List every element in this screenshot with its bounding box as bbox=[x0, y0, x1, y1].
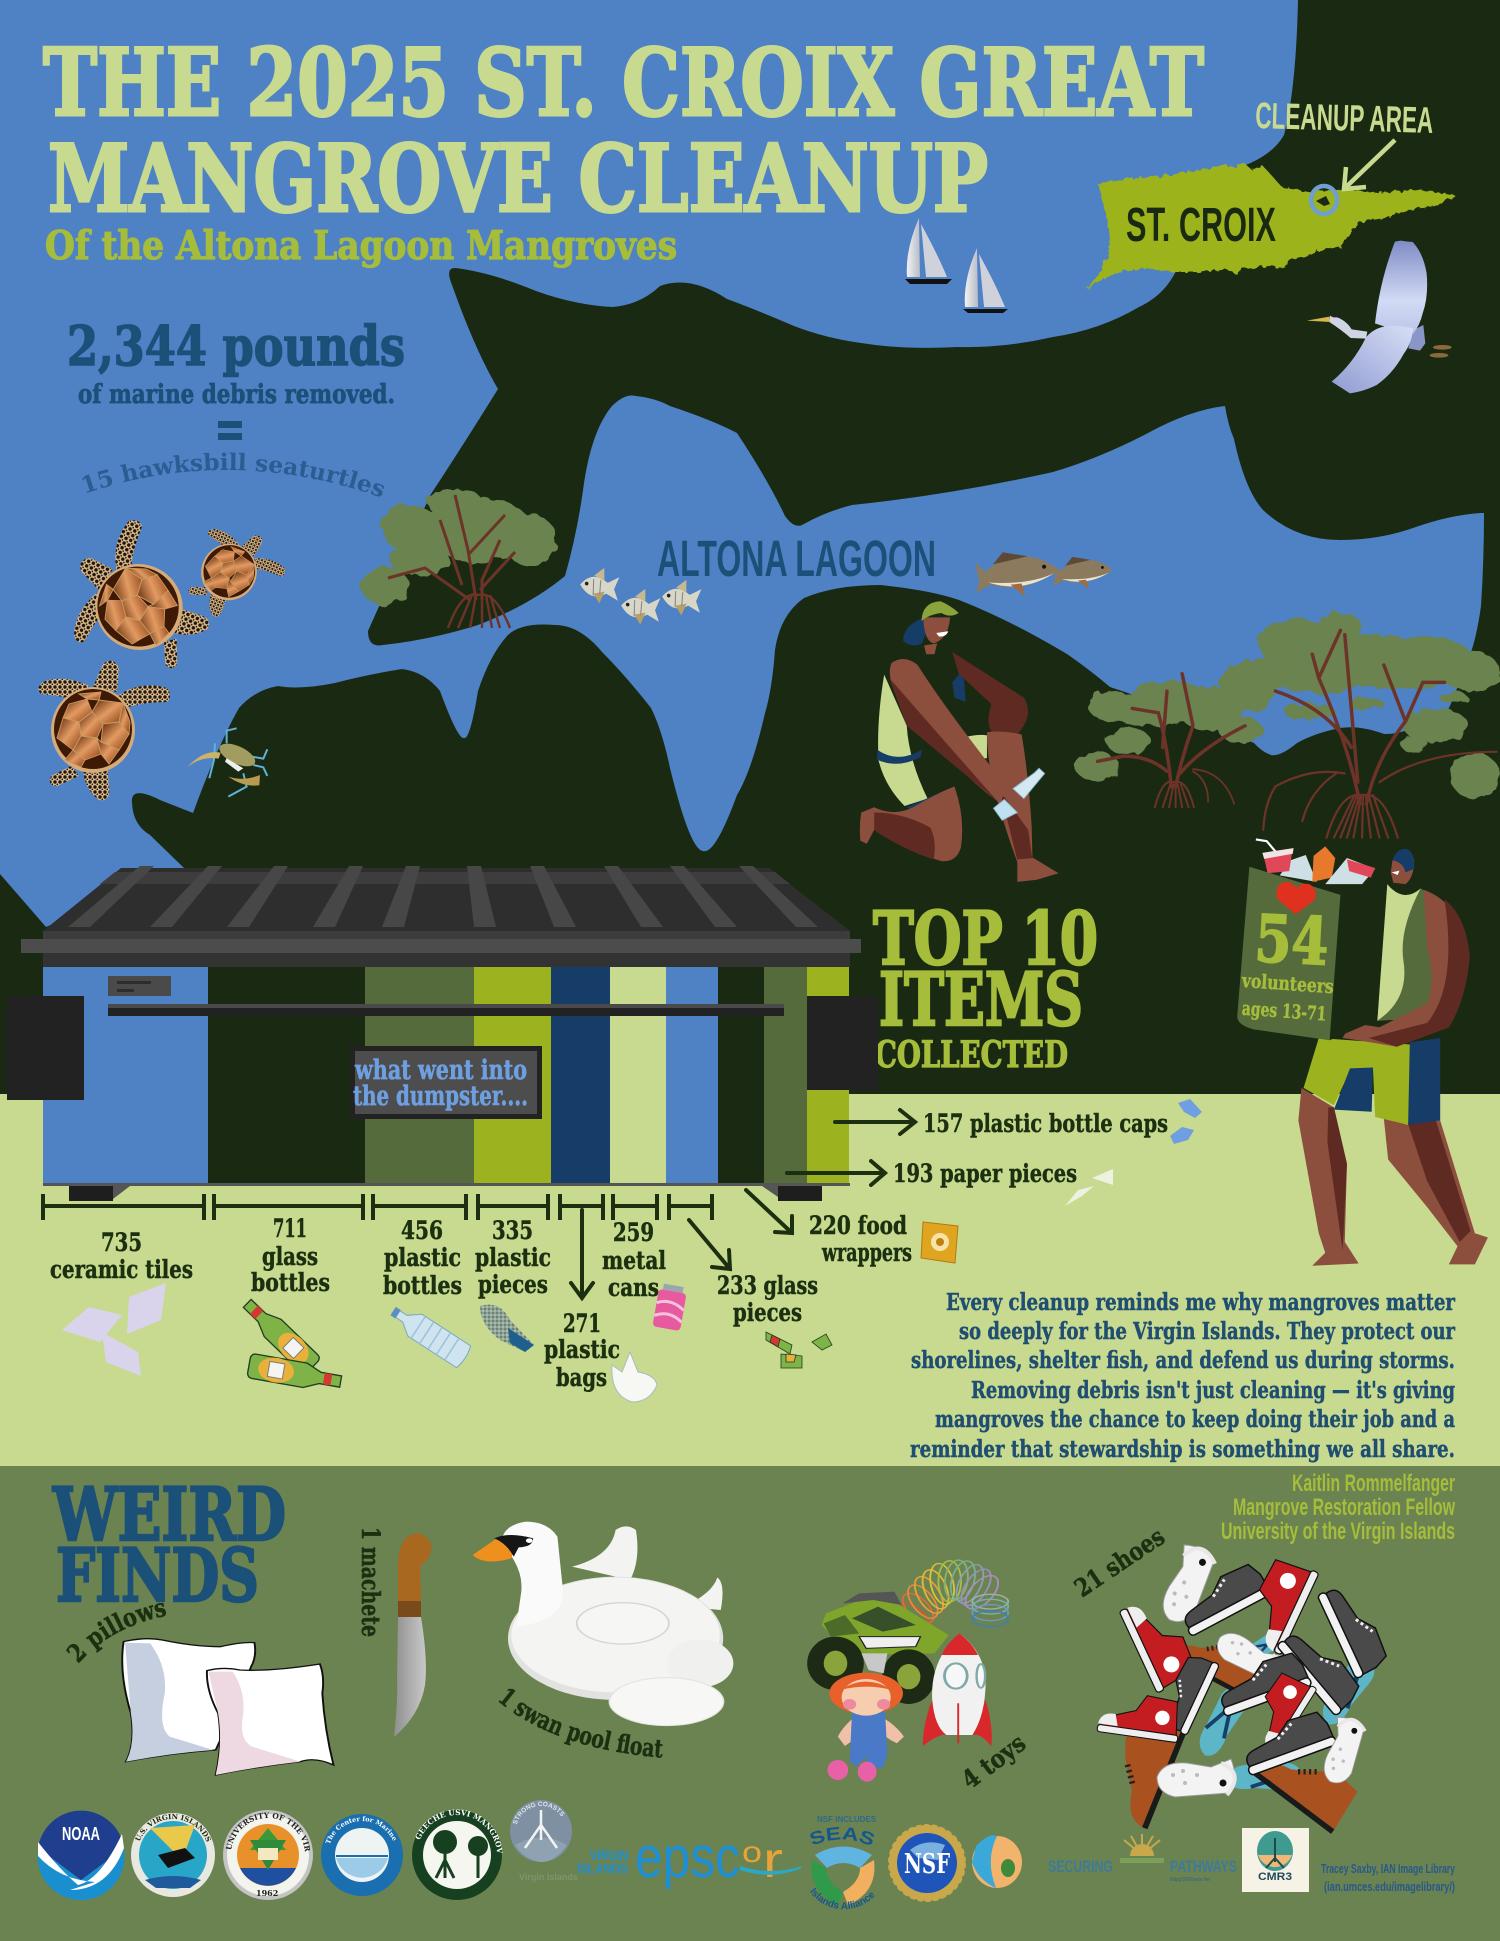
logo: CMR3 bbox=[1242, 1828, 1309, 1892]
toy: monster truck bbox=[807, 1592, 949, 1704]
item label: 335 plastic pieces: 335 bbox=[492, 1216, 533, 1245]
icon: metal can bbox=[652, 1283, 688, 1331]
section heading: top 10 items collected: ITEMS bbox=[879, 957, 1083, 1043]
logo: University of the Virgin Islands: UNIVERSITY OF THE VIRGIN bbox=[226, 1812, 310, 1852]
dumpster handle bar bbox=[108, 1004, 784, 1016]
logo: NSF Includes SEAS Islands Alliance: Islands Alliance bbox=[810, 1888, 874, 1910]
quote bbox=[910, 1289, 1456, 1463]
volunteer hair bbox=[903, 617, 928, 646]
logo: Strong Coasts bbox=[510, 1800, 578, 1882]
logo: NSF bbox=[889, 1825, 965, 1901]
item label: 233 glass pieces: pieces bbox=[733, 1298, 802, 1327]
illustration: volunteer kneeling with bottle bbox=[860, 601, 1059, 882]
icon: heron bbox=[1307, 241, 1452, 393]
dumpster plate bbox=[108, 976, 171, 996]
bag stat: 54 volunteers: volunteers bbox=[1240, 970, 1334, 998]
bag stat: 54 volunteers: ages 13-71 bbox=[1241, 998, 1327, 1026]
subtitle: Of the Altona Lagoon Mangroves bbox=[45, 223, 677, 269]
stat: pounds of debris: of marine debris removed. bbox=[78, 380, 395, 410]
logo: Securing Pathways: PATHWAYS bbox=[1170, 1857, 1237, 1876]
item label: 220 food wrappers: 220 food bbox=[809, 1211, 907, 1240]
section heading: top 10 items collected: TOP 10 bbox=[873, 896, 1098, 982]
item label: 335 plastic pieces bbox=[475, 1216, 551, 1299]
bracket rulers under dumpster bbox=[43, 1194, 712, 1220]
logo: NSF Includes SEAS Islands Alliance: SEAS bbox=[810, 1826, 874, 1845]
icon: small mangrove tree bbox=[361, 489, 556, 628]
logo: USVI mangroves bbox=[412, 1810, 503, 1900]
logo: USVI planning and natural resources bbox=[131, 1813, 215, 1897]
arrows from dumpster to labels bbox=[571, 1110, 915, 1298]
item label: 259 metal cans bbox=[602, 1218, 666, 1302]
logo: turtle circle bbox=[972, 1835, 1022, 1888]
logo: Securing Pathways: Bridging STEM Expertise Here bbox=[1170, 1877, 1210, 1883]
bag contents bbox=[1256, 839, 1375, 884]
section heading: weird finds: WEIRD bbox=[52, 1472, 286, 1558]
logo: VI EPSCoR: VIRGIN bbox=[590, 1847, 628, 1863]
item label: 233 glass pieces bbox=[717, 1271, 818, 1327]
logo: University of the Virgin Islands: 1962 bbox=[256, 1888, 278, 1898]
weird finds panel background bbox=[0, 1466, 1500, 1941]
man shirt bbox=[1377, 884, 1427, 1021]
item label: 259 metal cans: cans bbox=[608, 1273, 659, 1302]
dumpster feet bbox=[69, 1186, 822, 1201]
item label: 259 metal cans: 259 bbox=[613, 1218, 654, 1247]
icon: pillows bbox=[122, 1639, 333, 1775]
item label: 456 plastic bottles bbox=[383, 1216, 462, 1300]
item label: 271 plastic bags: bags bbox=[556, 1363, 607, 1392]
label: Altona Lagoon: ALTONA LAGOON bbox=[657, 530, 936, 587]
image credit bbox=[1321, 1861, 1456, 1894]
item label: 735 ceramic tiles: 735 bbox=[101, 1228, 142, 1257]
item label: 735 ceramic tiles bbox=[50, 1228, 193, 1284]
icon: glass bottles bbox=[239, 1295, 343, 1394]
logo: USVI mangroves: GEECHE USVI MANGROVES bbox=[416, 1810, 503, 1854]
logo: VI EPSCoR: ISLANDS bbox=[577, 1860, 628, 1876]
title: THE 2025 ST. CROIX GREAT bbox=[43, 28, 1204, 137]
title: MANGROVE CLEANUP bbox=[48, 124, 988, 233]
item label: 271 plastic bags bbox=[544, 1309, 620, 1392]
map: St. Croix island bbox=[1086, 163, 1455, 288]
item label: 711 glass bottles bbox=[251, 1214, 330, 1297]
item label: 271 plastic bags: 271 bbox=[563, 1309, 601, 1338]
logo: CMR3: CMR3 bbox=[1258, 1871, 1292, 1883]
volunteer legs bbox=[952, 652, 1028, 734]
icon: heart bbox=[1276, 882, 1316, 914]
sign: what went into the dumpster: the dumpster.... bbox=[353, 1081, 528, 1112]
item label: 233 glass pieces: 233 glass bbox=[717, 1271, 818, 1300]
ground band bbox=[0, 1094, 1500, 1466]
icon: plastic bag bbox=[612, 1352, 657, 1402]
logo: VI EPSCoR bbox=[577, 1825, 802, 1890]
item label: 711 glass bottles: 711 bbox=[273, 1214, 307, 1243]
logo: Securing Pathways bbox=[1048, 1834, 1237, 1883]
icon: ceramic tiles bbox=[62, 1283, 166, 1376]
section heading: top 10 items collected: COLLECTED bbox=[875, 1034, 1068, 1076]
toy: doll bbox=[827, 1673, 904, 1782]
dumpster base bbox=[43, 1183, 850, 1186]
dumpster side brackets bbox=[7, 996, 878, 1100]
map: land masses around Altona Lagoon bbox=[0, 0, 1500, 1100]
volunteer shorts bbox=[878, 675, 928, 806]
stat: pounds of debris: 2,344 pounds bbox=[67, 314, 405, 378]
icon: grouper fish bbox=[972, 547, 1114, 601]
label: 2 pillows: 2 pillows bbox=[66, 1603, 166, 1664]
item label: 271 plastic bags: plastic bbox=[544, 1335, 620, 1364]
toy: slinky bbox=[892, 1559, 1008, 1634]
section heading: weird finds: FINDS bbox=[56, 1533, 259, 1619]
item label: 220 food wrappers bbox=[809, 1211, 912, 1267]
stat: hawksbill seaturtles curved: 15 hawksbill seaturtles bbox=[82, 452, 384, 496]
label: 1 machete: 1 machete bbox=[356, 1527, 385, 1637]
logo: Securing Pathways: SECURING bbox=[1048, 1857, 1113, 1876]
icon: plastic pieces bbox=[480, 1305, 534, 1352]
man left leg bbox=[1298, 1088, 1359, 1266]
item label: 259 metal cans: metal bbox=[602, 1246, 666, 1275]
icon: pile of shoes bbox=[1097, 1542, 1391, 1834]
item label: 456 plastic bottles: plastic bbox=[384, 1243, 461, 1272]
bag side bbox=[1330, 884, 1386, 1040]
label: St. Croix: ST. CROIX bbox=[1126, 199, 1276, 252]
icon: blue crab bbox=[187, 728, 267, 797]
icon: sailboats bbox=[905, 218, 1008, 313]
section heading: top 10 items collected bbox=[873, 896, 1098, 1076]
dumpster lid bbox=[43, 868, 850, 967]
logo: NSF Includes SEAS Islands Alliance: NSF INCLUDES bbox=[817, 1815, 877, 1824]
dumpster bbox=[7, 866, 878, 1201]
man arm bbox=[1343, 890, 1470, 1047]
logo: Strong Coasts: STRONG COASTS bbox=[512, 1802, 564, 1824]
man right leg bbox=[1384, 1118, 1488, 1264]
icon: bottle caps bbox=[1170, 1099, 1202, 1144]
bag front bbox=[1237, 867, 1340, 1040]
item label: 456 plastic bottles: bottles bbox=[383, 1271, 462, 1300]
man head bbox=[1391, 853, 1414, 884]
man shorts bbox=[1304, 1038, 1411, 1125]
item label: 193 paper pieces: 193 paper pieces bbox=[893, 1159, 1077, 1188]
toy: rocket bbox=[923, 1633, 992, 1747]
arrow: to cleanup area bbox=[1344, 140, 1395, 189]
icon: toys group bbox=[807, 1559, 1008, 1782]
volunteer hat bbox=[921, 601, 959, 621]
icon: food wrapper bbox=[921, 1222, 958, 1263]
item label: 456 plastic bottles: 456 bbox=[401, 1216, 443, 1245]
icon: glass pieces bbox=[766, 1332, 832, 1368]
icon: swan pool float bbox=[473, 1522, 733, 1726]
dumpster body stripes bbox=[43, 967, 849, 1183]
label: 4 toys: 4 toys bbox=[956, 1728, 1031, 1795]
logo: NSF: NSF bbox=[904, 1849, 950, 1880]
item label: 711 glass bottles: glass bbox=[262, 1242, 318, 1271]
bag stat: 54 volunteers bbox=[1240, 901, 1334, 1026]
volunteer arm bbox=[890, 659, 1007, 802]
quote attribution bbox=[1221, 1470, 1455, 1545]
logo: VI EPSCoR: o bbox=[742, 1836, 762, 1869]
logo: Strong Coasts: Virgin Islands bbox=[519, 1872, 578, 1882]
illustration: mangrove trees bbox=[1075, 613, 1500, 838]
icon: silver fish school bbox=[578, 565, 704, 627]
label: 21 shoes: 21 shoes bbox=[1069, 1522, 1170, 1603]
stat: pounds of debris bbox=[67, 314, 405, 440]
sign: what went into the dumpster: what went into bbox=[354, 1055, 527, 1086]
logo: VI EPSCoR: epsc bbox=[635, 1825, 740, 1890]
item label: 711 glass bottles: bottles bbox=[251, 1268, 330, 1297]
icon: plastic bottle bbox=[386, 1300, 472, 1369]
item label: 735 ceramic tiles: ceramic tiles bbox=[50, 1255, 193, 1284]
logo: Center for Marine and Environmental Studies bbox=[321, 1814, 403, 1896]
label: 1 swan pool float: 1 swan pool float bbox=[498, 1688, 663, 1758]
illustration: volunteer carrying bag bbox=[1237, 839, 1488, 1266]
logo: NSF Includes SEAS Islands Alliance bbox=[810, 1815, 877, 1910]
map: cleanup area marker bbox=[1311, 186, 1337, 214]
sign: what went into the dumpster bbox=[350, 1046, 542, 1119]
icon: paper pieces bbox=[1065, 1169, 1113, 1206]
item label: 220 food wrappers: wrappers bbox=[821, 1238, 912, 1267]
logo: University of the Virgin Islands bbox=[223, 1810, 313, 1900]
bag stat: 54 volunteers: 54 bbox=[1253, 901, 1330, 981]
title bbox=[43, 28, 1204, 233]
icon: sea turtles bbox=[38, 507, 295, 800]
item label: 335 plastic pieces: plastic bbox=[475, 1243, 551, 1272]
section heading: weird finds bbox=[52, 1472, 286, 1619]
item label: 335 plastic pieces: pieces bbox=[478, 1270, 548, 1299]
logo: VI EPSCoR: r bbox=[763, 1832, 783, 1888]
logo: USVI planning and natural resources: U.S. VIRGIN ISLANDS bbox=[134, 1814, 211, 1842]
plastic bottle in hand bbox=[1013, 768, 1045, 799]
item label: 157 plastic bottle caps: 157 plastic bottle caps bbox=[923, 1109, 1168, 1138]
logo: Center for Marine and Environmental Studies: The Center for Marine bbox=[325, 1816, 396, 1844]
logo: NOAA: NOAA bbox=[62, 1824, 100, 1844]
icon: machete bbox=[394, 1533, 431, 1737]
logo: NOAA bbox=[38, 1811, 124, 1900]
